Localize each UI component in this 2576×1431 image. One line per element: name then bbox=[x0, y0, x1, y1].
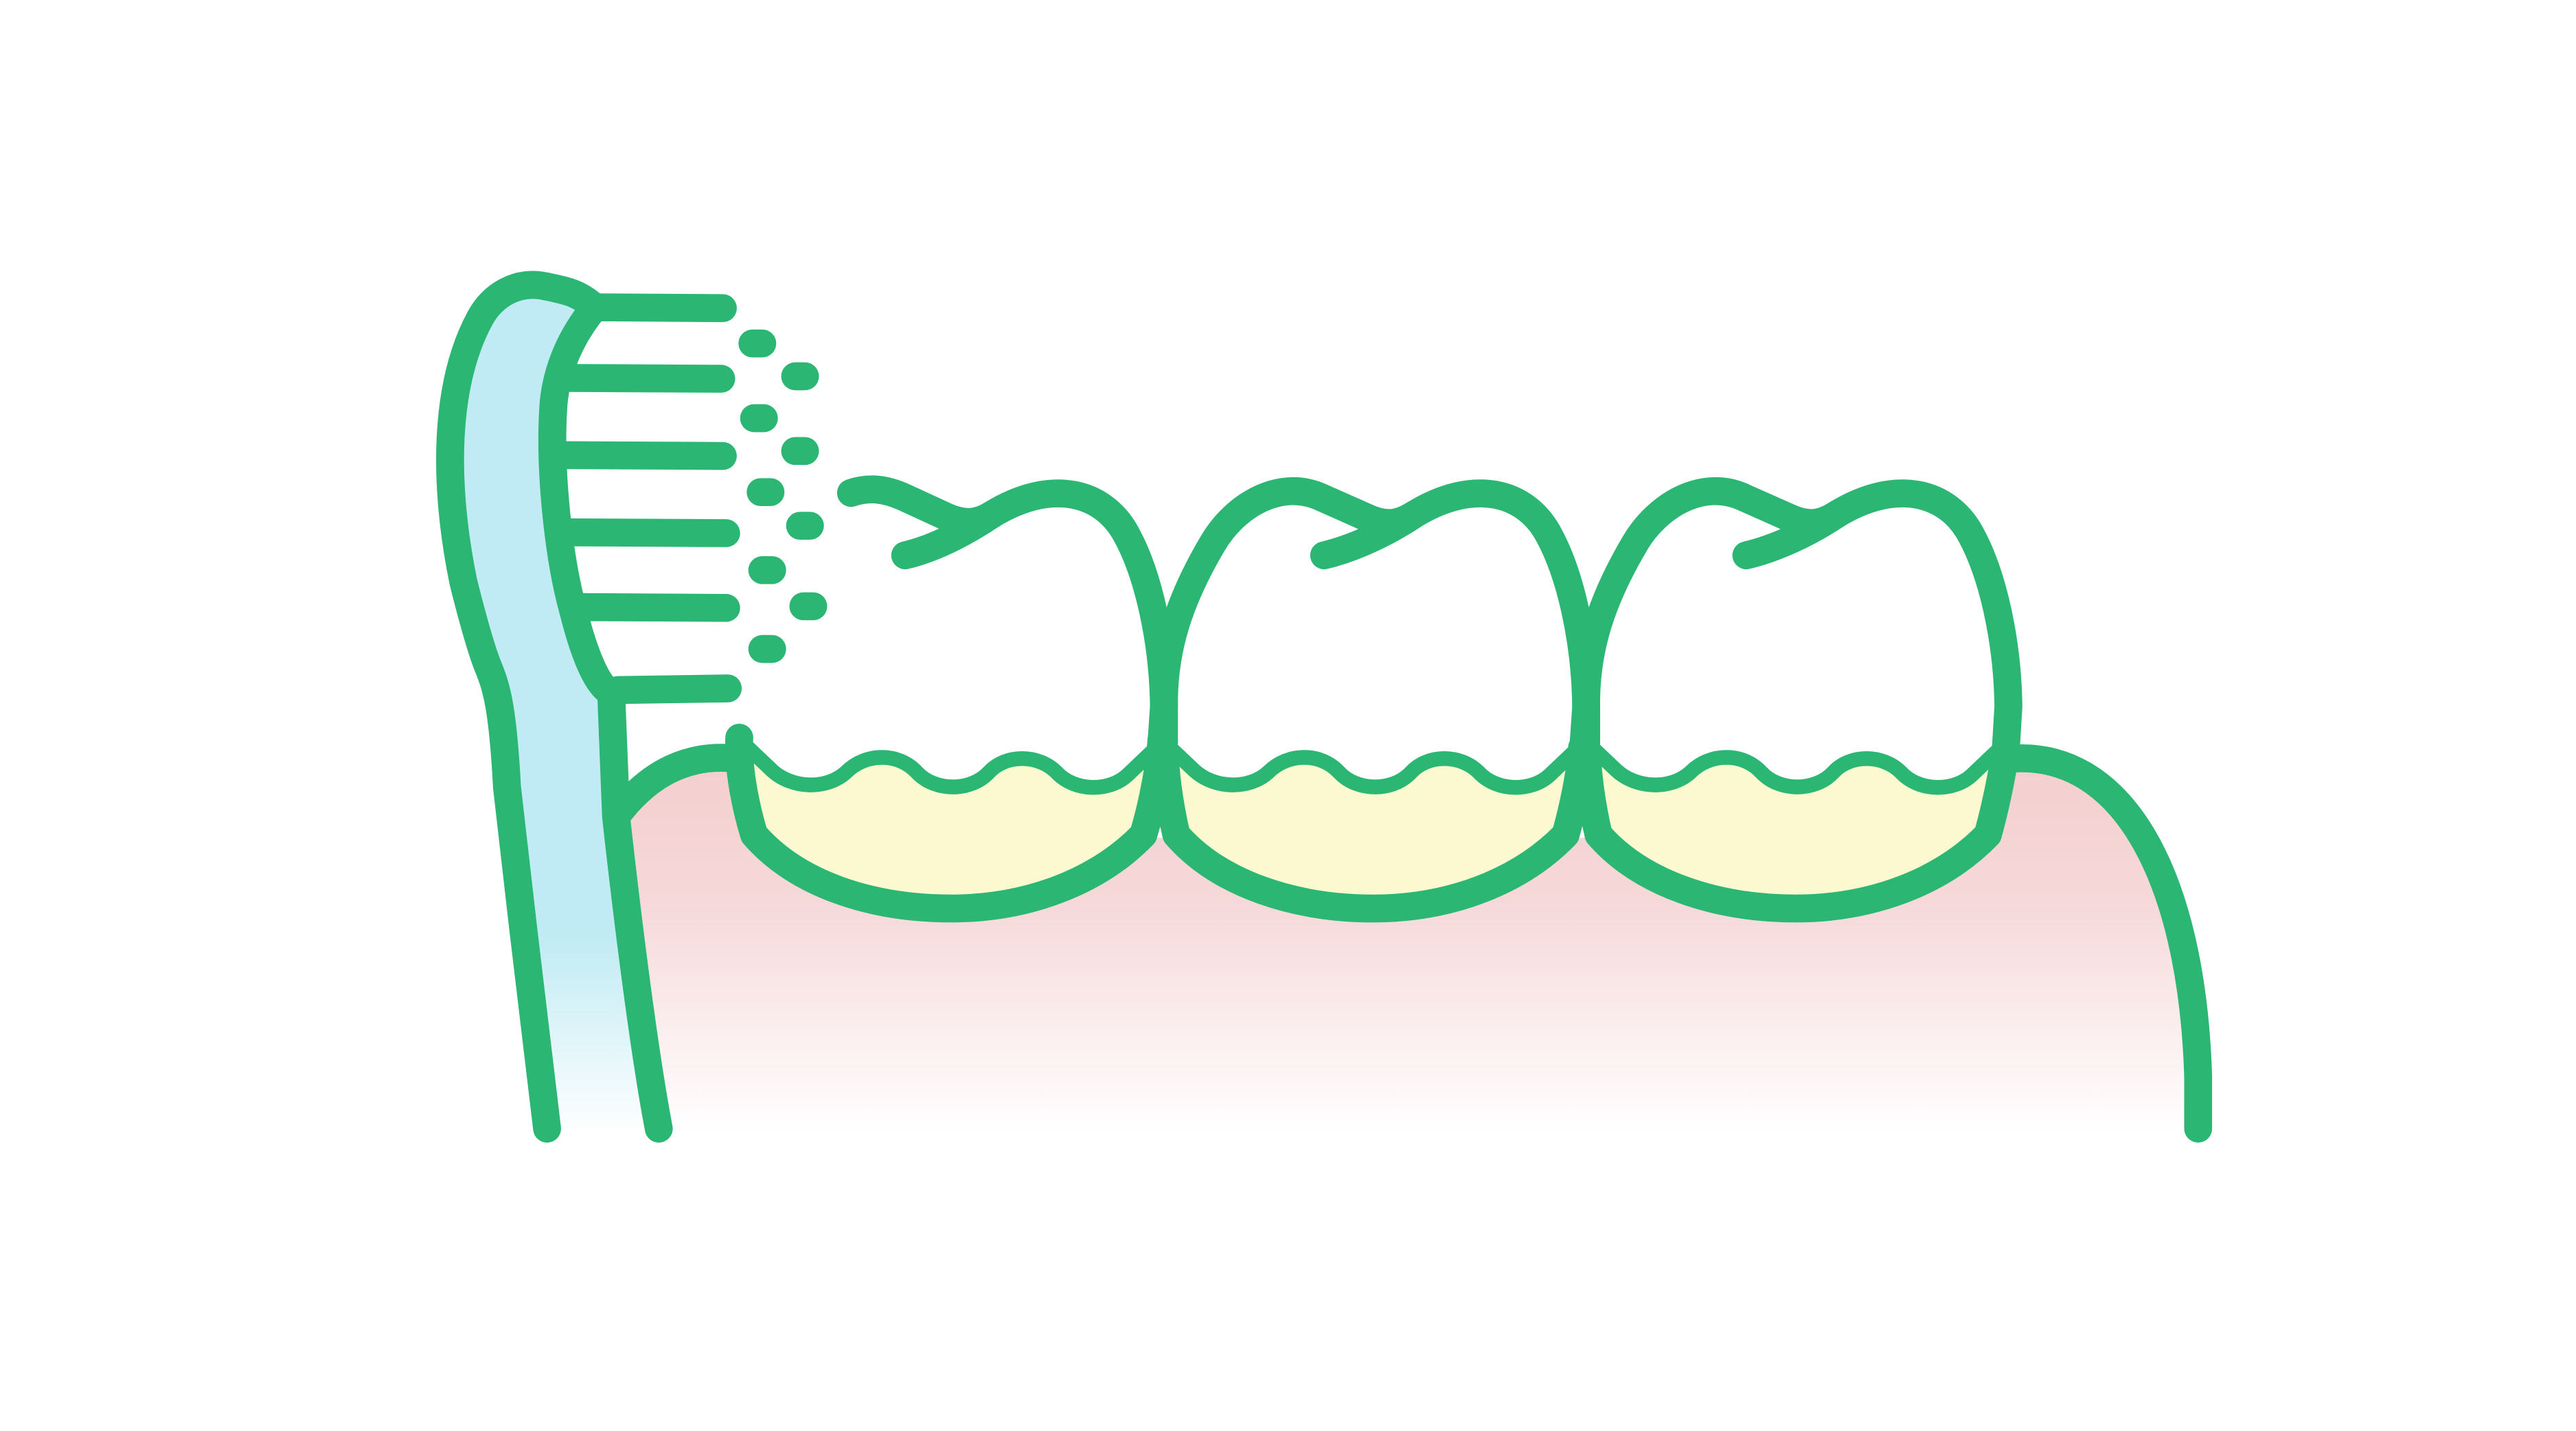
gum area bbox=[616, 758, 2198, 1134]
plaque-coloured root bbox=[1165, 740, 1582, 908]
tooth: middle bbox=[1164, 491, 1586, 908]
tooth: right bbox=[1586, 491, 2008, 908]
plaque-coloured root bbox=[1587, 740, 2005, 908]
toothbrush bbox=[450, 285, 813, 1130]
plaque-coloured root bbox=[739, 737, 1161, 908]
foam dots bbox=[753, 343, 813, 649]
bristles bbox=[558, 308, 728, 690]
brush handle and head bbox=[450, 285, 659, 1130]
tooth: left bbox=[739, 490, 1164, 908]
